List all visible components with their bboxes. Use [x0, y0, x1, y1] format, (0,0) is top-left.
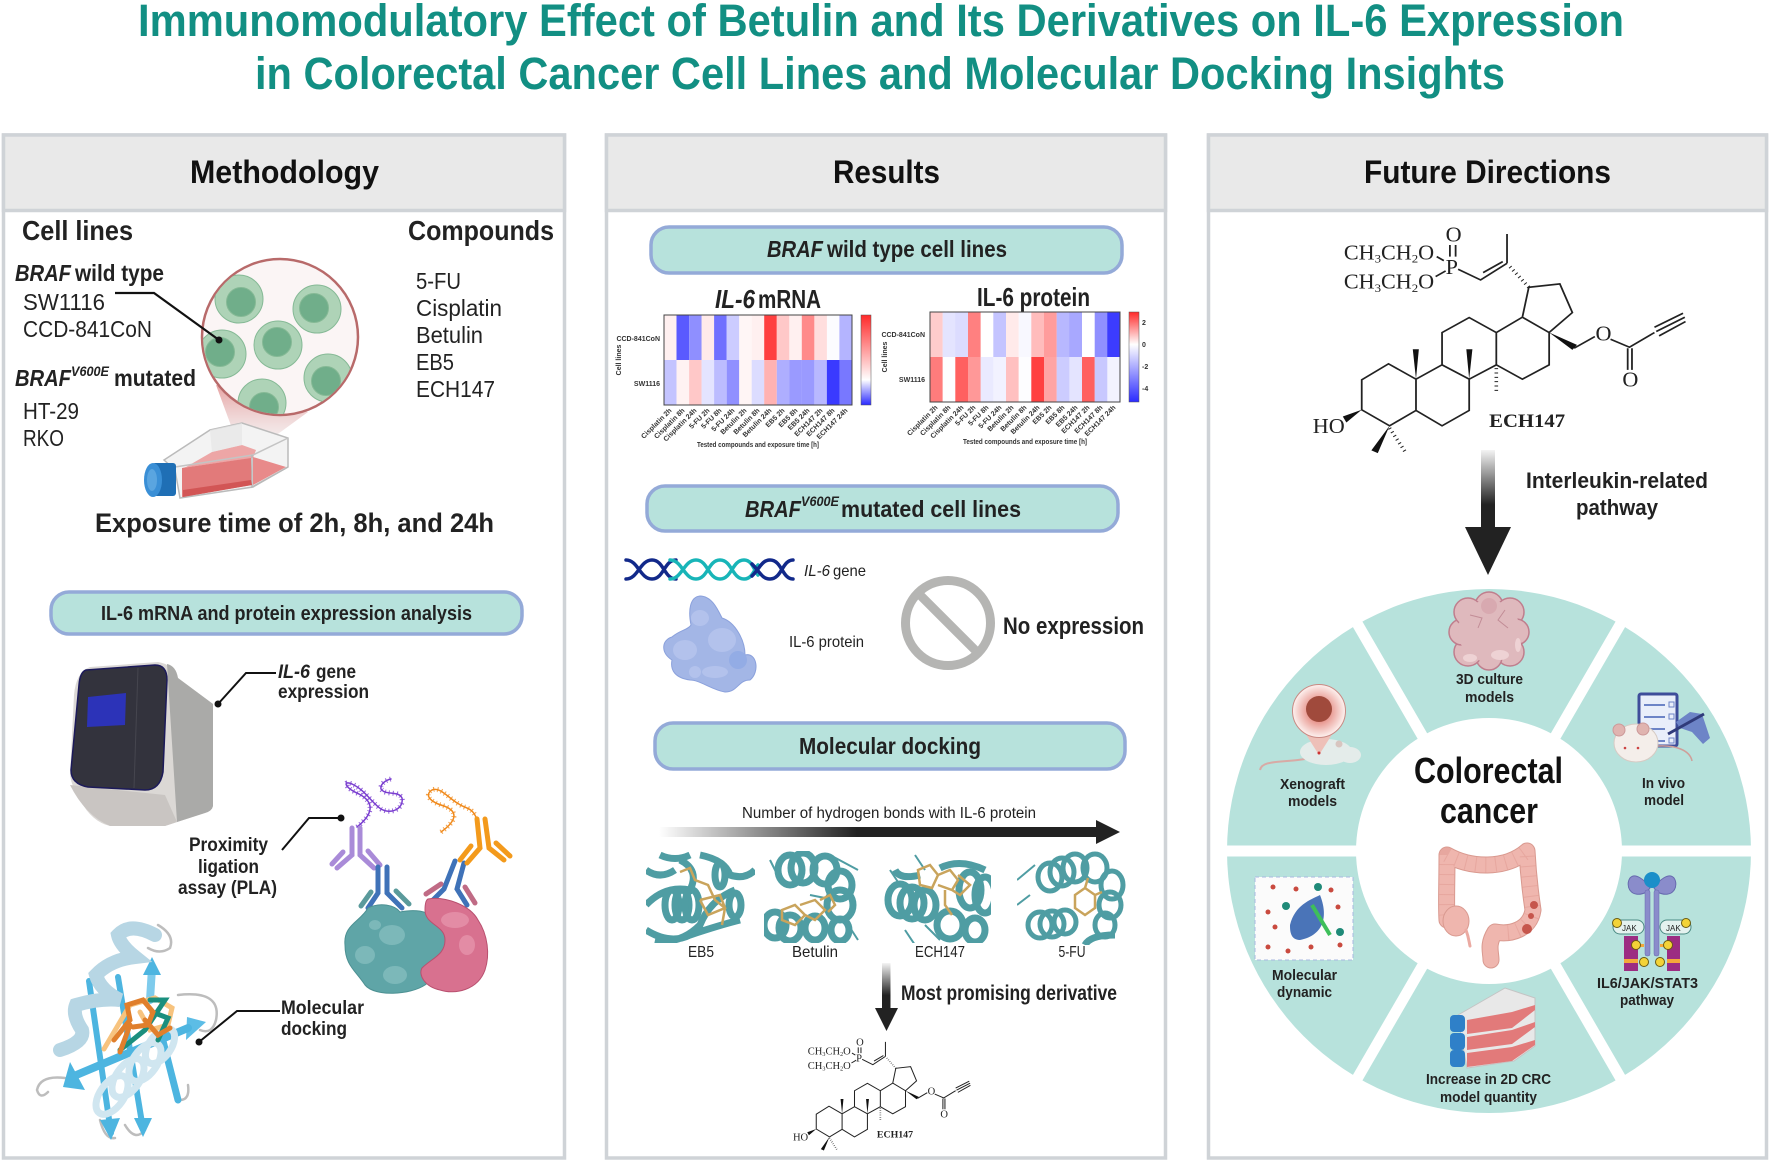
- heading: results: Results: [833, 154, 940, 190]
- pill: BRAF V600E mutated: BRAF: [745, 496, 802, 522]
- chart: IL-6 mRNA heatmap: [616, 284, 871, 449]
- segment: 3D culture models: [1449, 592, 1529, 706]
- text: cell lines: V600E: [71, 363, 110, 379]
- text: compounds: EB5: [416, 349, 454, 375]
- pill: BRAF wild type: wild type cell lines: [826, 236, 1007, 262]
- structure: ECH147 large: O: [1418, 270, 1434, 293]
- text: cell lines: [15, 215, 196, 451]
- heading: methodology: Methodology: [190, 154, 379, 190]
- arrow: interleukin-related pathway: pathway: [1576, 495, 1659, 520]
- callout: proximity ligation assay: ligation: [198, 857, 259, 878]
- pill: BRAF wild type: [651, 227, 1122, 273]
- structure: ECH147 small: ECH147: [877, 1130, 913, 1141]
- text: compounds: 5-FU: [416, 268, 461, 294]
- chart: IL-6 mRNA heatmap: 5-FU 24h: [711, 407, 736, 433]
- chart: IL-6 protein heatmap: 5-FU 8h: [967, 404, 990, 428]
- heading: future directions: Future Directions: [1364, 154, 1611, 190]
- segment: IL6/JAK/STAT3 pathway: [1597, 872, 1698, 1009]
- chart: IL-6 mRNA heatmap: IL-6: [715, 284, 755, 314]
- structure: ECH147 small: O: [928, 1087, 936, 1098]
- structure: ECH147 large: 2: [1412, 281, 1418, 295]
- arrow: most promising derivative: [875, 963, 1117, 1031]
- icon: proximity ligation antibodies on proteins: [332, 779, 510, 993]
- text: no expression: No expression: [1003, 613, 1144, 640]
- pill: molecular docking: [655, 723, 1125, 769]
- pill: expression analysis: IL-6 mRNA and protein expression analysis: [101, 603, 472, 625]
- chart: IL-6 protein heatmap: CCD-841CoN: [881, 332, 925, 339]
- pill: BRAF V600E mutated: V600E: [801, 493, 840, 509]
- pill: BRAF V600E mutated: [647, 486, 1118, 531]
- structure: ECH147 large: CH: [1381, 241, 1412, 264]
- text: compounds: [408, 215, 554, 402]
- text: center label: Colorectal: [1414, 750, 1563, 791]
- chart: IL-6 mRNA heatmap: ECH147 8h: [806, 407, 836, 438]
- structure: ECH147 large: O: [1446, 223, 1462, 246]
- label: IL-6 protein: IL-6 protein: [789, 634, 864, 651]
- structure: ECH147 large: 2: [1412, 252, 1418, 266]
- chart: IL-6 mRNA heatmap: 5-FU 2h: [688, 407, 711, 431]
- segment: xenograft models: models: [1288, 793, 1337, 810]
- callout: IL-6 gene expression: expression: [278, 682, 369, 703]
- chart: IL-6 mRNA heatmap: EB5 24h: [787, 407, 811, 432]
- structure: ECH147 small: HO: [793, 1133, 809, 1144]
- figure: ECH147 docking: [888, 855, 995, 961]
- chart: IL-6 protein heatmap: Cisplatin 8h: [919, 404, 952, 437]
- chart: colorectal cancer wheel: [1220, 589, 1758, 1113]
- chart: IL-6 protein heatmap: IL-6 protein: [977, 282, 1090, 312]
- arrow: number of hydrogen bonds: [659, 805, 1120, 844]
- structure: ECH147 small: 3: [822, 1067, 825, 1073]
- panel: results: [606, 135, 1166, 1158]
- structure: ECH147 large: P: [1446, 256, 1458, 279]
- chart: IL-6 mRNA heatmap: Betulin 24h: [742, 407, 773, 439]
- chart: IL-6 mRNA heatmap: SW1116: [634, 381, 660, 388]
- text: compounds: Cisplatin: [416, 295, 502, 321]
- callout: IL-6 gene expression: gene: [316, 662, 356, 683]
- structure: ECH147 small: CH: [808, 1047, 822, 1057]
- chart: IL-6 protein heatmap: Betulin 8h: [1000, 404, 1028, 433]
- callout: IL-6 gene expression: [214, 662, 369, 708]
- text: cell lines: mutated: [114, 365, 196, 391]
- chart: IL-6 protein heatmap: ECH147 2h: [1061, 404, 1091, 435]
- chart: IL-6 protein heatmap: EB5 2h: [1032, 404, 1053, 426]
- structure: ECH147 large: [1313, 223, 1686, 453]
- structure: ECH147 small: P: [856, 1054, 862, 1065]
- text: cell lines: CCD-841CoN: [23, 316, 152, 342]
- callout: proximity ligation assay: [178, 814, 344, 899]
- text: cell lines: SW1116: [23, 289, 105, 315]
- text: compounds: Betulin: [416, 322, 483, 348]
- arrow: interleukin-related pathway: Interleukin-related: [1526, 468, 1708, 493]
- panel: methodology: [4, 135, 564, 1158]
- text: cell lines: BRAF: [15, 260, 72, 286]
- structure: ECH147 large: CH: [1344, 270, 1375, 293]
- chart: IL-6 mRNA heatmap: ECH147 24h: [816, 407, 849, 441]
- chart: IL-6 protein heatmap: EB5 8h: [1045, 404, 1066, 426]
- chart: IL-6 protein heatmap: SW1116: [899, 377, 925, 384]
- heading: results: [606, 135, 1166, 210]
- structure: ECH147 small: O: [856, 1038, 864, 1049]
- callout: molecular docking: Molecular: [281, 998, 365, 1019]
- callout: molecular docking: docking: [281, 1019, 347, 1040]
- segment: IL6/JAK/STAT3 pathway: JAK: [1666, 924, 1681, 933]
- chart: IL-6 protein heatmap: Tested compounds and exposure time [h]: [963, 439, 1087, 446]
- label: IL-6 gene: IL-6: [804, 563, 830, 580]
- structure: ECH147 large: O: [1622, 368, 1638, 391]
- icon: qPCR machine: [70, 662, 213, 826]
- figure: ECH147 docking: ECH147: [915, 944, 965, 961]
- figure: EB5 docking: EB5: [688, 944, 714, 961]
- text: compounds: Compounds: [408, 215, 554, 246]
- chart: IL-6 mRNA heatmap: Cisplatin 8h: [653, 407, 686, 440]
- text: cell lines: BRAF: [15, 365, 72, 391]
- segment: increase in 2D CRC model quantity: Increase in 2D CRC: [1426, 1071, 1551, 1088]
- text: cell lines: RKO: [23, 425, 64, 451]
- structure: ECH147 small: 2: [840, 1052, 843, 1058]
- chart: IL-6 protein heatmap: Cisplatin 24h: [930, 404, 965, 440]
- chart: IL-6 protein heatmap: -2: [1142, 364, 1148, 371]
- chart: IL-6 mRNA heatmap: Cisplatin 2h: [640, 407, 673, 440]
- segment: xenograft models: [1260, 684, 1361, 810]
- structure: ECH147 small: CH: [825, 1047, 841, 1057]
- chart: IL-6 protein heatmap: Cisplatin 2h: [906, 404, 939, 437]
- text: cell lines: Cell lines: [22, 215, 133, 246]
- text: cell lines: wild type: [74, 260, 164, 286]
- structure: ECH147 large: 3: [1375, 281, 1381, 295]
- panel: future directions: [1208, 135, 1766, 1158]
- chart: IL-6 protein heatmap: [881, 282, 1148, 446]
- text: center label: [1414, 750, 1563, 831]
- chart: IL-6 mRNA heatmap: Tested compounds and exposure time [h]: [697, 442, 819, 449]
- structure: ECH147 small: [793, 1038, 970, 1150]
- segment: molecular dynamic: Molecular: [1272, 967, 1337, 984]
- segment: IL6/JAK/STAT3 pathway: IL6/JAK/STAT3: [1597, 975, 1698, 992]
- chart: IL-6 protein heatmap: Cell lines: [882, 342, 889, 372]
- icon: no symbol: [906, 580, 990, 666]
- segment: increase in 2D CRC model quantity: [1426, 988, 1551, 1106]
- figure: 5-FU docking: [1017, 854, 1123, 961]
- icon: IL-6 gene DNA: [626, 560, 793, 579]
- structure: ECH147 small: 2: [840, 1067, 843, 1073]
- figure: Betulin docking: Betulin: [792, 944, 838, 961]
- label: IL-6 gene: gene: [833, 563, 866, 580]
- callout: IL-6 gene expression: IL-6: [278, 662, 310, 683]
- chart: IL-6 protein heatmap: Betulin 24h: [1010, 404, 1041, 436]
- segment: molecular dynamic: dynamic: [1277, 984, 1332, 1001]
- chart: IL-6 protein heatmap: 2: [1142, 320, 1146, 327]
- arrow: interleukin-related pathway: [1465, 450, 1708, 575]
- segment: xenograft models: Xenograft: [1280, 776, 1345, 793]
- chart: IL-6 mRNA heatmap: EB5 8h: [778, 407, 799, 429]
- icon: magnified cells over culture flask: [115, 259, 358, 498]
- text: center label: cancer: [1440, 790, 1538, 831]
- chart: IL-6 mRNA heatmap: Betulin 2h: [720, 407, 748, 436]
- structure: ECH147 large: O: [1418, 241, 1434, 264]
- chart: IL-6 protein heatmap: 0: [1142, 342, 1146, 349]
- figure: EB5 docking: [646, 855, 755, 961]
- chart: IL-6 protein heatmap: Betulin 2h: [987, 404, 1015, 433]
- segment: IL6/JAK/STAT3 pathway: pathway: [1620, 992, 1675, 1009]
- segment: 3D culture models: 3D culture: [1456, 671, 1523, 688]
- pill: expression analysis: [51, 592, 522, 634]
- structure: ECH147 large: O: [1596, 322, 1612, 345]
- structure: ECH147 small: O: [940, 1110, 948, 1120]
- label: IL-6 gene: [804, 563, 866, 580]
- segment: increase in 2D CRC model quantity: model quantity: [1440, 1089, 1538, 1106]
- pill: BRAF V600E mutated: mutated cell lines: [841, 496, 1021, 522]
- chart: IL-6 protein heatmap: 5-FU 24h: [978, 404, 1003, 430]
- icon: molecular docking ribbon: [37, 925, 217, 1140]
- heading: methodology: [4, 135, 564, 210]
- chart: IL-6 mRNA heatmap: Betulin 8h: [733, 407, 761, 436]
- chart: IL-6 protein heatmap: -4: [1142, 386, 1148, 393]
- chart: IL-6 protein heatmap: ECH147 24h: [1084, 404, 1117, 438]
- heading: future directions: [1208, 135, 1766, 210]
- callout: molecular docking: [196, 998, 365, 1046]
- structure: ECH147 small: 3: [822, 1052, 825, 1058]
- structure: ECH147 large: CH: [1381, 270, 1412, 293]
- arrow: most promising derivative: Most promising derivative: [901, 982, 1117, 1005]
- structure: ECH147 large: HO: [1313, 415, 1345, 438]
- chart: IL-6 mRNA heatmap: CCD-841CoN: [616, 336, 660, 343]
- structure: ECH147 small: O: [843, 1047, 851, 1057]
- text: cell lines: HT-29: [23, 398, 79, 424]
- chart: IL-6 protein heatmap: EB5 24h: [1055, 404, 1079, 429]
- icon: IL-6 protein blob: [664, 596, 756, 692]
- title: in Colorectal Cancer Cell Lines and Molecular Docking Insights: [255, 48, 1505, 99]
- chart: IL-6 mRNA heatmap: 5-FU 8h: [700, 407, 723, 431]
- callout: proximity ligation assay: assay (PLA): [178, 878, 277, 899]
- structure: ECH147 large: ECH147: [1489, 411, 1565, 432]
- title: [138, 0, 1624, 99]
- chart: IL-6 mRNA heatmap: EB5 2h: [765, 407, 786, 429]
- segment: in vivo model: model: [1644, 792, 1684, 809]
- segment: IL6/JAK/STAT3 pathway: JAK: [1622, 924, 1637, 933]
- pill: molecular docking: Molecular docking: [799, 733, 981, 759]
- figure: Betulin docking: [764, 853, 858, 961]
- structure: ECH147 small: CH: [825, 1061, 841, 1072]
- segment: in vivo model: In vivo: [1642, 775, 1685, 792]
- text: compounds: ECH147: [416, 376, 495, 402]
- callout: proximity ligation assay: Proximity: [189, 835, 268, 856]
- segment: in vivo model: [1613, 694, 1710, 809]
- segment: 3D culture models: models: [1465, 689, 1514, 706]
- structure: ECH147 large: CH: [1344, 241, 1375, 264]
- chart: IL-6 protein heatmap: ECH147 8h: [1074, 404, 1104, 435]
- pill: BRAF wild type: BRAF: [767, 236, 824, 262]
- structure: ECH147 large: 3: [1375, 252, 1381, 266]
- icon: colon: [1443, 851, 1538, 960]
- structure: ECH147 small: O: [843, 1061, 851, 1072]
- chart: IL-6 protein heatmap: 5-FU 2h: [954, 404, 977, 428]
- chart: IL-6 mRNA heatmap: ECH147 2h: [794, 407, 824, 438]
- chart: IL-6 mRNA heatmap: Cell lines: [616, 345, 623, 375]
- chart: IL-6 mRNA heatmap: Cisplatin 24h: [663, 407, 698, 443]
- arrow: number of hydrogen bonds: Number of hydrogen bonds with IL-6 protein: [742, 805, 1036, 822]
- structure: ECH147 small: CH: [808, 1061, 822, 1072]
- segment: molecular dynamic: [1255, 877, 1353, 1001]
- figure: 5-FU docking: 5-FU: [1058, 944, 1086, 961]
- text: exposure time: Exposure time of 2h, 8h, and 24h: [95, 508, 494, 538]
- chart: IL-6 mRNA heatmap: mRNA: [758, 284, 821, 314]
